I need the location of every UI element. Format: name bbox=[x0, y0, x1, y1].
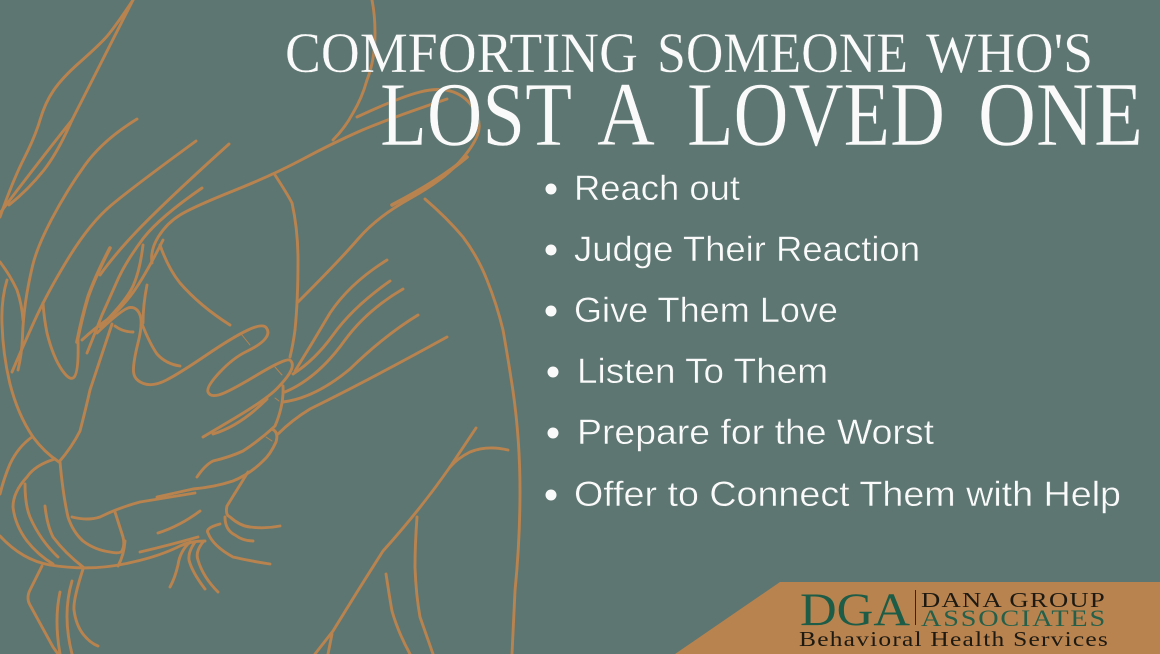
sleeve folds on the shoulder bbox=[278, 260, 447, 434]
item: offer to connect them with help: Offer to Connect Them with Help bbox=[574, 475, 1121, 514]
logo: Dana Group: DANA GROUP bbox=[921, 588, 1106, 612]
item: give them love: Give Them Love bbox=[574, 291, 838, 330]
comforting hand and fingers bbox=[72, 307, 292, 519]
item: prepare for the worst: Prepare for the Worst bbox=[577, 413, 934, 452]
title line 2 bbox=[380, 64, 1143, 165]
title line 1: WHO'S bbox=[926, 22, 1093, 85]
bullet list bbox=[546, 169, 1121, 514]
logo: DGA monogram: DGA bbox=[800, 584, 910, 636]
logo: Associates: ASSOCIATES bbox=[921, 606, 1107, 631]
item: listen to them: Listen To Them bbox=[577, 352, 828, 391]
logo: Behavioral Health Services: Behavioral Health Services bbox=[799, 627, 1109, 651]
title line 2: LOVED bbox=[687, 64, 945, 165]
title line 1: COMFORTING bbox=[285, 22, 638, 85]
title line 1 bbox=[285, 22, 1093, 85]
title line 2: A bbox=[597, 64, 655, 165]
forearm and scarf folds bbox=[0, 437, 280, 654]
item: reach out: Reach out bbox=[574, 169, 740, 208]
logo banner bbox=[675, 582, 1160, 654]
title bbox=[285, 22, 1143, 165]
title line 2: ONE bbox=[978, 64, 1143, 165]
item: judge their reaction: Judge Their Reaction bbox=[574, 230, 920, 269]
title line 1: SOMEONE bbox=[657, 22, 908, 85]
hair strands bbox=[0, 0, 447, 378]
title line 2: LOST bbox=[380, 64, 572, 165]
back and shoulder outline bbox=[315, 199, 520, 654]
head and hood outline bbox=[2, 0, 479, 462]
line illustration: two people embracing bbox=[0, 0, 520, 654]
